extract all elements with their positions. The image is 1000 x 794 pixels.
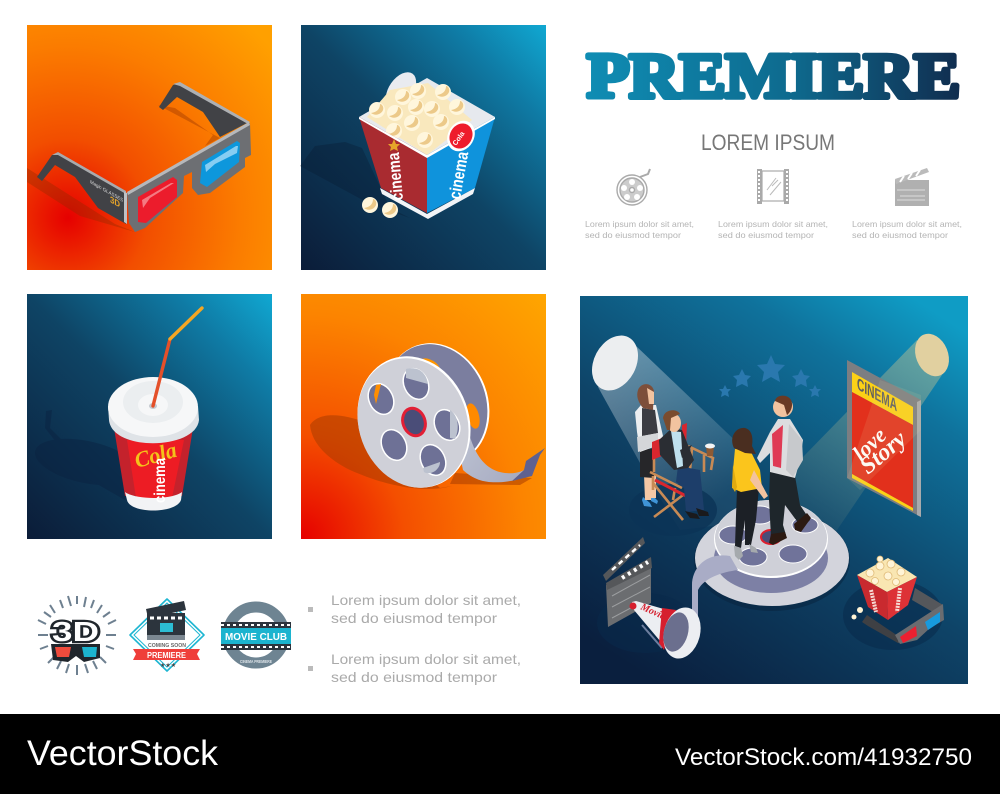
text block: clapper caption	[852, 219, 962, 240]
popcorn bucket back	[359, 78, 495, 155]
arm label: 3D	[110, 194, 120, 210]
footer bar	[0, 714, 1000, 794]
standing woman	[635, 384, 663, 507]
text block: reel caption	[585, 219, 694, 240]
far temple arm	[159, 83, 249, 137]
red lens	[138, 177, 177, 223]
box bottom strip	[380, 188, 475, 219]
cup label text	[131, 437, 180, 503]
red side of box	[359, 117, 427, 213]
icon: film frame	[757, 169, 789, 204]
panel: popcorn	[300, 25, 546, 270]
icon: film reel outline	[617, 169, 650, 205]
cup lid	[108, 377, 199, 443]
front reel disc	[339, 340, 489, 504]
glasses shadow	[27, 105, 220, 232]
popcorn badge	[442, 116, 480, 156]
bullet list item 2: Lorem ipsum dolor sit amet,	[331, 651, 521, 667]
floor reel holes	[719, 506, 818, 566]
arm label: Magic GLASSES	[90, 179, 124, 204]
badge: 3D	[38, 596, 116, 675]
reel shadow	[310, 415, 452, 489]
icon: clapperboard outline	[895, 168, 929, 206]
cinema labels: cinema	[445, 150, 472, 201]
back reel ring	[368, 328, 506, 480]
film tail	[692, 555, 738, 623]
spotlight left	[583, 328, 647, 398]
popcorn kernels	[369, 83, 465, 148]
spotlight right	[909, 329, 955, 381]
popcorn group spot	[843, 580, 943, 650]
straw	[153, 308, 202, 406]
gaps in back ring	[417, 355, 443, 377]
coffee cup	[705, 444, 715, 456]
megaphone	[630, 601, 706, 663]
footer url: VectorStock.com/41932750	[675, 744, 972, 771]
woman in yellow	[732, 428, 768, 560]
bullet list item 1	[308, 592, 521, 626]
director chair	[650, 423, 713, 520]
panel: cola cup	[27, 294, 272, 539]
text block: clapper caption: Lorem ipsum dolor sit amet,	[852, 219, 962, 229]
badge: movie club	[221, 607, 291, 664]
badge: premiere clapper: ★★★	[160, 662, 176, 669]
clapper spot	[597, 593, 693, 653]
near temple arm	[37, 153, 126, 224]
film strip tail	[437, 366, 545, 482]
badge: movie club: MOVIE CLUB	[225, 631, 287, 643]
box rim	[359, 117, 495, 158]
cup shadow	[31, 410, 141, 500]
cinema labels	[384, 139, 472, 201]
small 3D glasses	[862, 588, 944, 644]
3D lettering: 3D	[52, 616, 99, 647]
panel: film reel	[301, 294, 546, 539]
bullet list item 1: Lorem ipsum dolor sit amet,	[331, 592, 521, 608]
badge: movie club: CINEMA PREMIERE	[240, 659, 272, 664]
cup label text: cinema	[152, 458, 169, 503]
stars	[719, 355, 821, 397]
cup body	[114, 428, 193, 496]
text block: reel caption: Lorem ipsum dolor sit amet,	[585, 219, 694, 229]
poster	[847, 360, 921, 517]
title: PREMIERE	[587, 40, 960, 111]
text block: frame caption	[718, 219, 828, 240]
reel holes	[363, 364, 465, 480]
clapper	[146, 601, 186, 618]
popcorn fill	[367, 83, 472, 155]
floor reel	[692, 500, 850, 623]
blue side of box	[427, 117, 495, 213]
bullet list item 1: sed do eiusmod tempor	[331, 610, 497, 626]
blue lens	[200, 141, 240, 187]
text block: clapper caption: sed do eiusmod tempor	[852, 230, 948, 240]
badge: premiere clapper: PREMIERE	[147, 651, 187, 660]
poster: CINEMA	[857, 374, 897, 416]
popcorn badge: Cola	[452, 131, 466, 147]
tucked lid	[380, 67, 422, 113]
badge glasses	[51, 644, 100, 662]
spotlight beam left	[598, 345, 760, 530]
ribbon	[133, 649, 200, 660]
panel: 3D glasses	[27, 25, 272, 270]
spilled kernels	[362, 197, 398, 218]
coming soon: COMING SOON	[148, 643, 186, 649]
spotlight beam right	[770, 340, 942, 533]
cup label text: Cola	[131, 437, 180, 473]
subheading: LOREM IPSUM	[701, 130, 835, 155]
small popcorn box	[852, 556, 917, 620]
man in jacket	[757, 396, 811, 545]
floor reel hub	[761, 530, 781, 544]
badge: premiere clapper	[130, 599, 204, 671]
sunburst rays	[38, 596, 116, 675]
glasses front frame	[127, 123, 251, 232]
seated man	[659, 410, 715, 519]
reel hub	[399, 405, 429, 439]
box shadow	[300, 142, 410, 218]
chair spot	[629, 484, 717, 536]
panel: premiere scene	[580, 296, 968, 684]
poster: Story	[855, 426, 912, 480]
poster: love	[847, 422, 891, 466]
footer logo: VectorStock	[27, 734, 219, 773]
clapperboard	[603, 537, 652, 627]
text block: frame caption: Lorem ipsum dolor sit amet,	[718, 219, 828, 229]
bullet list item 2: sed do eiusmod tempor	[331, 669, 497, 685]
text block: reel caption: sed do eiusmod tempor	[585, 230, 681, 240]
megaphone: Movie	[638, 601, 667, 622]
cinema labels: cinema	[384, 151, 407, 201]
bullet list item 2	[308, 651, 521, 685]
text block: frame caption: sed do eiusmod tempor	[718, 230, 814, 240]
